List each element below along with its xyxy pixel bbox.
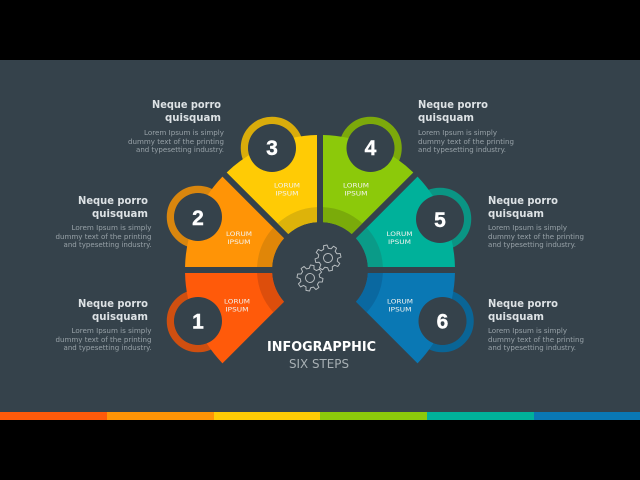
- text block 1: [56, 297, 152, 352]
- wedge 6: [356, 273, 455, 363]
- number 2: 2: [192, 207, 204, 230]
- body 6: Lorem Ipsum is simply: [488, 327, 567, 335]
- ring 1: [170, 294, 226, 348]
- number 5: 5: [434, 209, 446, 232]
- body 3: Lorem Ipsum is simply: [144, 129, 224, 137]
- heading 6: Neque porro: [488, 297, 558, 310]
- wedge label 2: IPSUM: [228, 239, 250, 246]
- title: INFOGRAPPHIC: [267, 339, 376, 355]
- body 5: Lorem Ipsum is simply: [488, 224, 567, 232]
- step 6 segment: [356, 273, 470, 363]
- text block 3: [128, 98, 224, 154]
- wedge 4: [323, 135, 413, 234]
- ring 4: [343, 120, 398, 176]
- wedge 5 inner shade: [356, 228, 383, 267]
- wedge label 1: LORUM: [224, 298, 250, 306]
- subtitle: SIX STEPS: [289, 357, 349, 371]
- number 6: 6: [437, 310, 448, 334]
- number 4: 4: [365, 137, 377, 160]
- heading 4: quisquam: [418, 111, 474, 124]
- number 3: 3: [266, 137, 278, 160]
- number 1: 1: [192, 310, 204, 334]
- heading 2: Neque porro: [78, 194, 148, 207]
- wedge 3: [227, 135, 317, 234]
- ring 5: [412, 192, 468, 246]
- heading 5: Neque porro: [488, 194, 558, 207]
- number badge 3: [248, 124, 296, 172]
- wedge 1: [185, 273, 284, 363]
- body 4: and typesetting industry.: [418, 146, 506, 154]
- heading 2: quisquam: [92, 207, 148, 220]
- step 5 segment: [356, 177, 468, 267]
- body 4: dummy text of the printing: [418, 138, 514, 146]
- wedge 3 inner shade: [278, 207, 317, 234]
- body 5: dummy text of the printing: [488, 233, 584, 241]
- background panel: [0, 60, 640, 420]
- wedge 5: [356, 177, 455, 267]
- body 3: and typesetting industry.: [136, 146, 224, 154]
- number badge 5: [416, 195, 464, 243]
- ring 2: [170, 190, 226, 244]
- number badge 2: [174, 193, 222, 241]
- ring 3: [244, 120, 300, 176]
- wedge label 3: IPSUM: [276, 190, 298, 198]
- body 4: Lorem Ipsum is simply: [418, 129, 497, 137]
- wedge label 5: IPSUM: [388, 239, 411, 246]
- wedge 2 inner shade: [257, 228, 284, 267]
- heading 1: Neque porro: [78, 297, 148, 310]
- number badge 4: [346, 124, 394, 172]
- body 2: Lorem Ipsum is simply: [72, 224, 152, 232]
- wedge label 6: LORUM: [387, 298, 413, 306]
- wedge label 2: LORUM: [226, 231, 252, 238]
- text block 4: [418, 98, 514, 154]
- wedge label 5: LORUM: [386, 231, 412, 238]
- body 5: and typesetting industry.: [488, 241, 576, 249]
- step 2 segment: [170, 177, 284, 267]
- body 1: and typesetting industry.: [64, 344, 152, 352]
- body 1: dummy text of the printing: [56, 336, 152, 344]
- wedge label 1: IPSUM: [226, 306, 248, 314]
- heading 4: Neque porro: [418, 98, 488, 111]
- step 4 segment: [323, 120, 413, 234]
- body 2: dummy text of the printing: [56, 233, 152, 241]
- wedge 1 inner shade: [257, 273, 284, 312]
- wedge 4 inner shade: [323, 207, 362, 234]
- heading 5: quisquam: [488, 207, 544, 220]
- text block 5: [488, 194, 584, 249]
- body 6: dummy text of the printing: [488, 336, 584, 344]
- icon: gears: [295, 243, 343, 293]
- text block 2: [56, 194, 152, 249]
- number badge 1: [174, 297, 222, 345]
- heading 3: Neque porro: [152, 98, 221, 111]
- step 3 segment: [227, 120, 317, 234]
- wedge label 6: IPSUM: [388, 306, 412, 314]
- body 2: and typesetting industry.: [64, 241, 152, 249]
- heading 3: quisquam: [165, 111, 221, 124]
- step 1 segment: [170, 273, 284, 363]
- body 1: Lorem Ipsum is simply: [72, 327, 152, 335]
- heading 6: quisquam: [488, 310, 544, 323]
- wedge label 4: IPSUM: [344, 190, 368, 198]
- body 3: dummy text of the printing: [128, 138, 224, 146]
- text block 6: [488, 297, 584, 352]
- wedge label 4: LORUM: [343, 182, 369, 190]
- ring 6: [415, 294, 470, 348]
- wedge 6 inner shade: [356, 273, 383, 312]
- heading 1: quisquam: [92, 310, 148, 323]
- wedge label 3: LORUM: [274, 182, 300, 190]
- body 6: and typesetting industry.: [488, 344, 576, 352]
- number badge 6: [418, 297, 466, 345]
- bottom colour stripe: [0, 412, 640, 420]
- wedge 2: [185, 177, 284, 267]
